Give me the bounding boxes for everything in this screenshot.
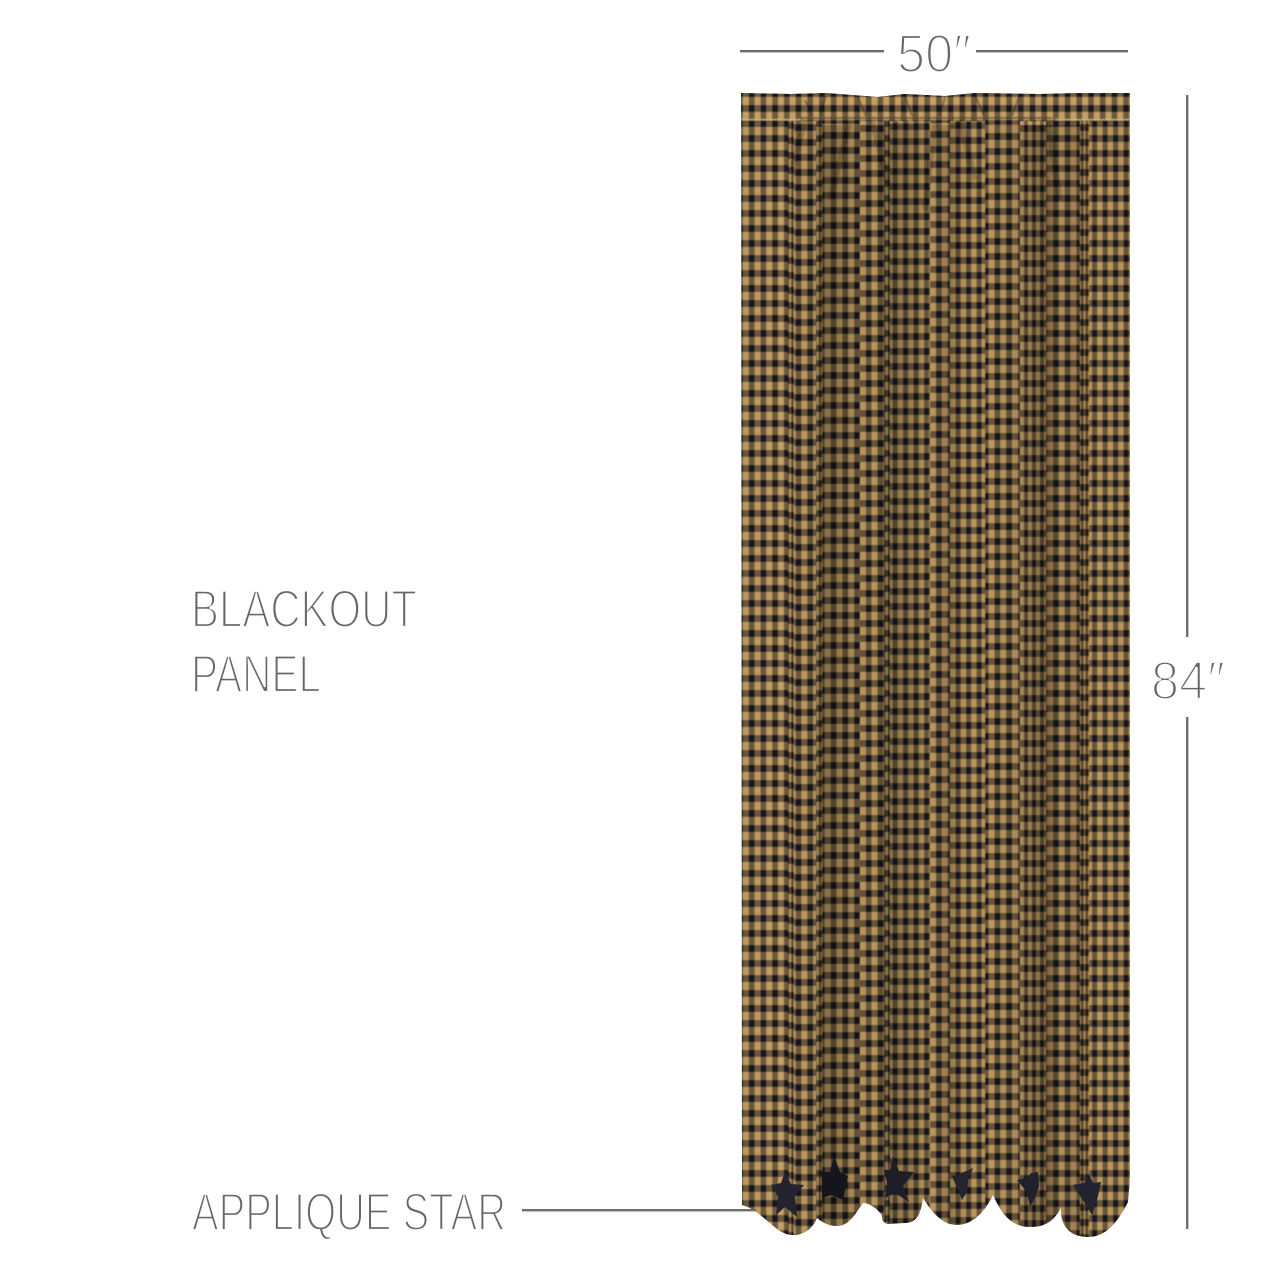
applique star 4 — [952, 1168, 973, 1200]
rod pocket header — [741, 93, 1130, 210]
applique star 6 — [1073, 1174, 1101, 1215]
applique star 3 — [884, 1156, 914, 1202]
label: blackout panel: PANEL — [191, 645, 321, 704]
label: blackout panel — [191, 580, 417, 704]
label: blackout panel: BLACKOUT — [191, 580, 417, 639]
applique star 5 — [1017, 1172, 1039, 1207]
width dimension: 50 inches: 50″ — [897, 24, 971, 84]
applique star 2 — [821, 1156, 848, 1200]
height dimension: 84 inches: 84″ — [1151, 651, 1225, 711]
applique star 1 — [771, 1172, 804, 1217]
fold shading — [741, 125, 1130, 1240]
label: applique star with leader line: APPLIQUE STAR — [192, 1183, 506, 1242]
curtain panel — [741, 76, 1130, 1255]
gingham fold strips — [741, 76, 1130, 1255]
